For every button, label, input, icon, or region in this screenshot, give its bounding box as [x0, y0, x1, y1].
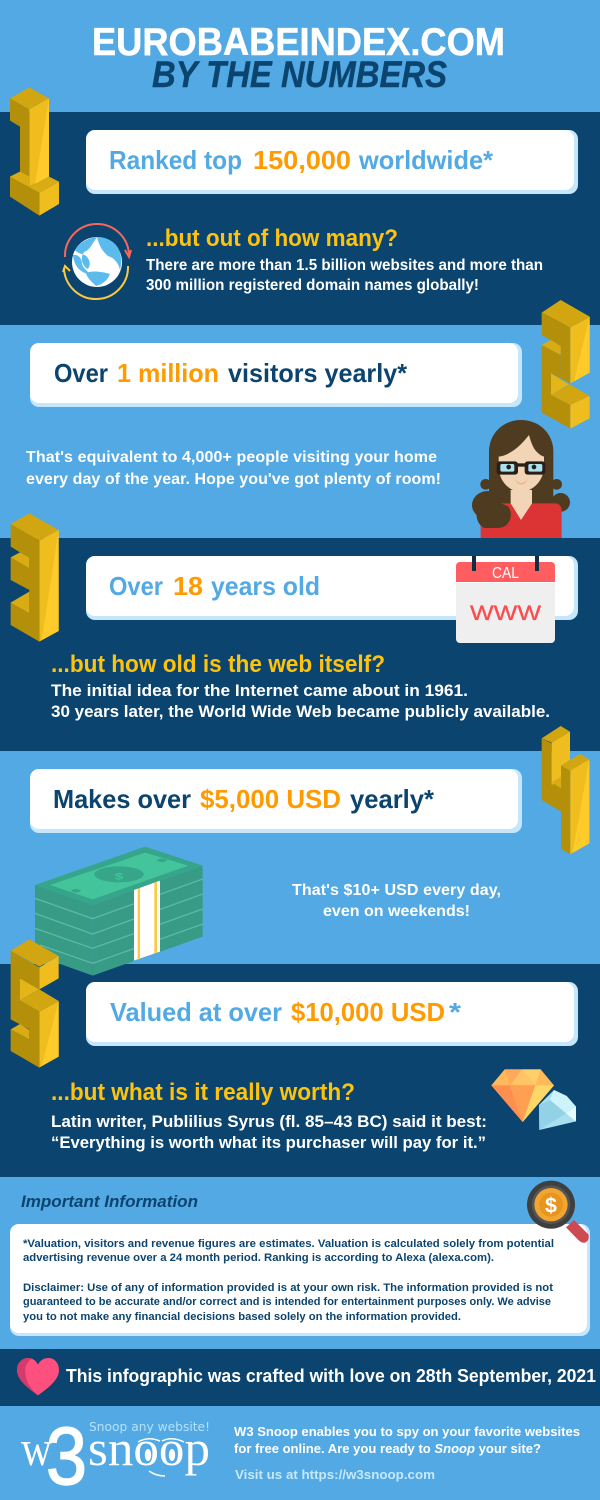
card: ranked — [86, 130, 578, 194]
panel: over 1 million visitors — [26, 300, 590, 538]
card: ranked: Ranked top — [109, 145, 242, 175]
card: age: years old — [211, 571, 320, 601]
icon: calendar — [456, 556, 555, 643]
text: every day: even on weekends! — [323, 903, 470, 920]
numeral 5 — [11, 939, 59, 1068]
card: visitors: 1 million — [117, 358, 219, 388]
card: revenue: yearly* — [350, 784, 435, 814]
text: w3snoop promo: for free online. Are you ready to Snoop your site? — [234, 1441, 541, 1456]
numeral 2 — [542, 300, 590, 429]
title: EUROBABEINDEX.COM — [92, 21, 505, 64]
text: every day — [292, 882, 501, 920]
text: how old is the web — [51, 651, 550, 721]
card: value: * — [449, 997, 462, 1027]
icon: magnifying glass with dollar — [527, 1181, 589, 1243]
card: disclaimer: advertising revenue over a 24 month period. Ranking is according to Alexa (alexa.com). — [23, 1252, 494, 1264]
icon: money stack: $ — [115, 872, 123, 882]
icon: money stack — [35, 847, 203, 976]
text: w3snoop promo: W3 Snoop enables you to spy on your favorite websites — [234, 1424, 580, 1439]
text: how old is the web: 30 years later, the World Wide Web became publicly available. — [51, 702, 550, 721]
numeral 1 — [10, 87, 59, 216]
icon: heart — [17, 1358, 59, 1395]
panel: ranked top 150,000 — [10, 87, 578, 299]
numeral 3 — [11, 513, 59, 642]
card: value — [86, 982, 578, 1046]
text: equivalent visitors — [26, 449, 441, 488]
card: ranked: worldwide* — [358, 145, 494, 175]
text: but out of how many: ...but out of how many? — [146, 225, 398, 252]
text: equivalent visitors: That's equivalent to 4,000+ people visiting your home — [26, 449, 437, 466]
logo: w3snoop: snoop — [88, 1420, 210, 1476]
text: what is it really worth: ...but what is it really worth? — [51, 1079, 355, 1106]
text: but out of how many — [146, 225, 543, 294]
text: what is it really worth — [51, 1079, 487, 1152]
icon: globe — [63, 224, 131, 299]
card: revenue — [30, 769, 522, 833]
card: disclaimer: *Valuation, visitors and revenue figures are estimates. Valuation is calculated solely from potential — [23, 1238, 554, 1250]
icon: calendar: CAL — [492, 565, 519, 582]
text: equivalent visitors: every day of the year. Hope you've got plenty of room! — [26, 471, 441, 488]
card: visitors: Over — [54, 358, 108, 388]
icon: magnifying glass with dollar: $ — [545, 1193, 557, 1217]
text: what is it really worth: “Everything is worth what its purchaser will pay for it.” — [51, 1133, 486, 1152]
logo: w3snoop: w — [21, 1420, 52, 1476]
card: revenue: $5,000 USD — [200, 784, 341, 814]
logo: w3snoop: 3 — [46, 1411, 87, 1500]
card: disclaimer — [10, 1224, 590, 1336]
icon: calendar: WWW — [470, 602, 541, 625]
card: age — [86, 556, 578, 620]
card: age: 18 — [173, 571, 203, 601]
text: but out of how many: There are more than 1.5 billion websites and more than — [146, 257, 543, 274]
logo: w3snoop — [21, 1411, 210, 1500]
title: BY THE NUMBERS — [152, 54, 447, 95]
panel: makes over 5,000 — [30, 726, 589, 976]
card: value: Valued at over — [110, 997, 282, 1027]
text: w3snoop promo — [234, 1424, 580, 1456]
card: value: $10,000 USD — [291, 997, 445, 1027]
card: visitors — [30, 343, 522, 407]
heading: important information: Important Information — [21, 1192, 198, 1211]
panel: crafted with love — [17, 1358, 596, 1395]
card: disclaimer: guaranteed to be accurate and/or correct and is intended for entertainment purposes only. We advise — [23, 1296, 551, 1308]
text: visit link: Visit us at https://w3snoop.com — [235, 1467, 435, 1482]
card: ranked: 150,000 — [253, 145, 351, 175]
text: but out of how many: 300 million registered domain names globally! — [146, 277, 479, 294]
card: age: Over — [109, 571, 163, 601]
numeral 4 — [542, 726, 589, 854]
card: disclaimer: Disclaimer: Use of any of information provided is at your own risk. The information provided is not — [23, 1282, 553, 1294]
logo: w3snoop: Snoop any website! — [89, 1419, 210, 1434]
icon: diamonds — [491, 1069, 576, 1130]
title — [92, 21, 505, 95]
text: what is it really worth: Latin writer, Publilius Syrus (fl. 85–43 BC) said it best: — [51, 1112, 487, 1131]
card: revenue: Makes over — [53, 784, 191, 814]
text: every day: That's $10+ USD every day, — [292, 882, 501, 899]
card: disclaimer: you to not make any financial decisions based solely on the information provided. — [23, 1311, 461, 1323]
text: how old is the web: The initial idea for the Internet came about in 1961. — [51, 681, 468, 700]
panel: important information — [10, 1181, 590, 1336]
text: how old is the web: ...but how old is the web itself? — [51, 651, 385, 678]
panel: over 18 years old — [11, 513, 578, 721]
card: visitors: visitors yearly* — [228, 358, 408, 388]
panel: w3snoop footer — [21, 1411, 580, 1500]
icon: woman with glasses — [472, 420, 570, 538]
panel: valued at over 10,000 — [11, 939, 578, 1152]
